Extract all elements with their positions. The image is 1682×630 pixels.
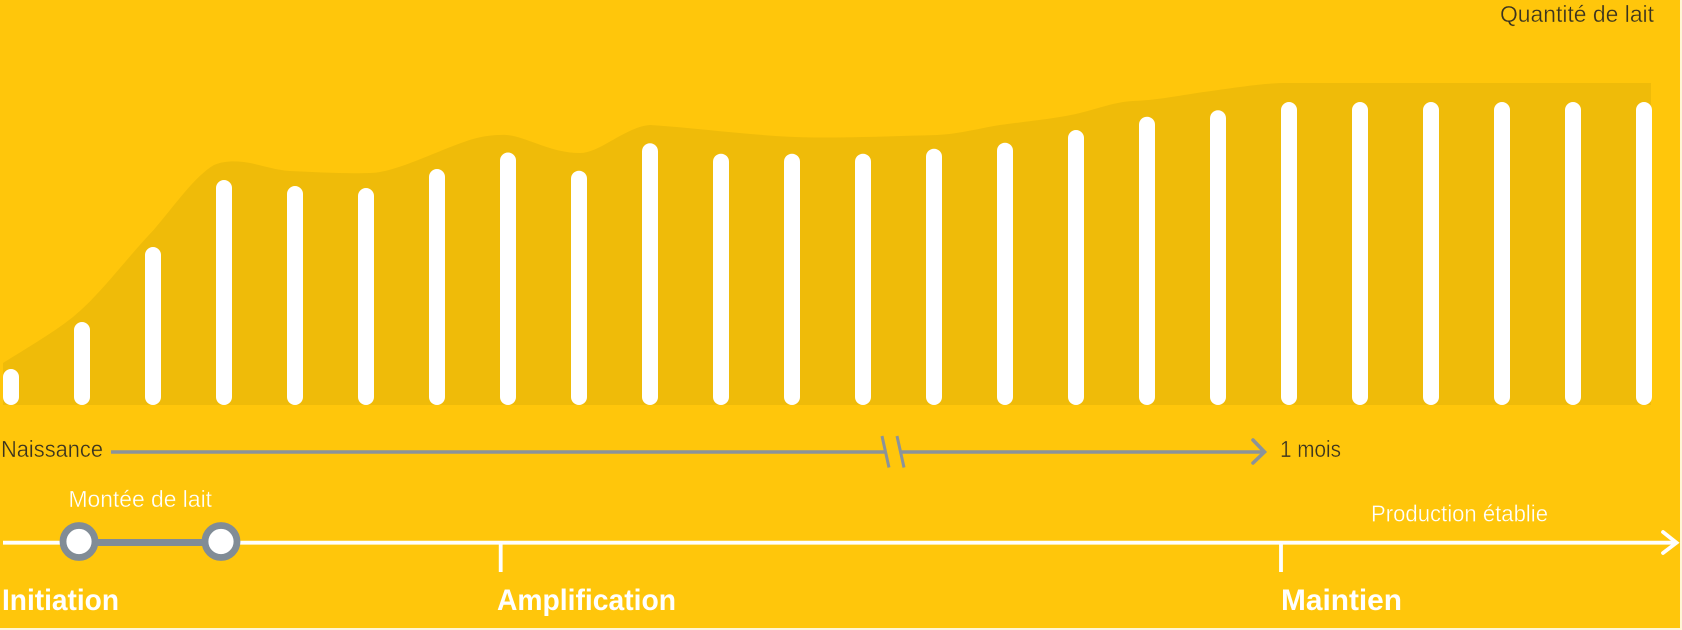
- bar chart: daily milk quantity: [3, 102, 1652, 405]
- label: naissance: Naissance: [1, 436, 103, 462]
- area: milk quantity curve: [3, 83, 1651, 405]
- arrow: time axis from birth to one month: [111, 436, 1264, 468]
- arrow: lactation phases timeline: [3, 532, 1676, 572]
- label: montée de lait: Montée de lait: [68, 486, 213, 512]
- label: 1 mois: 1 mois: [1280, 436, 1341, 462]
- milk onset marker: [63, 526, 237, 558]
- phase label: amplification: Amplification: [497, 584, 676, 617]
- axis label: quantité de lait: Quantité de lait: [1500, 1, 1655, 27]
- label: production établie: Production établie: [1371, 500, 1548, 526]
- phase label: maintien: Maintien: [1281, 584, 1402, 617]
- phase label: initiation: Initiation: [2, 584, 119, 617]
